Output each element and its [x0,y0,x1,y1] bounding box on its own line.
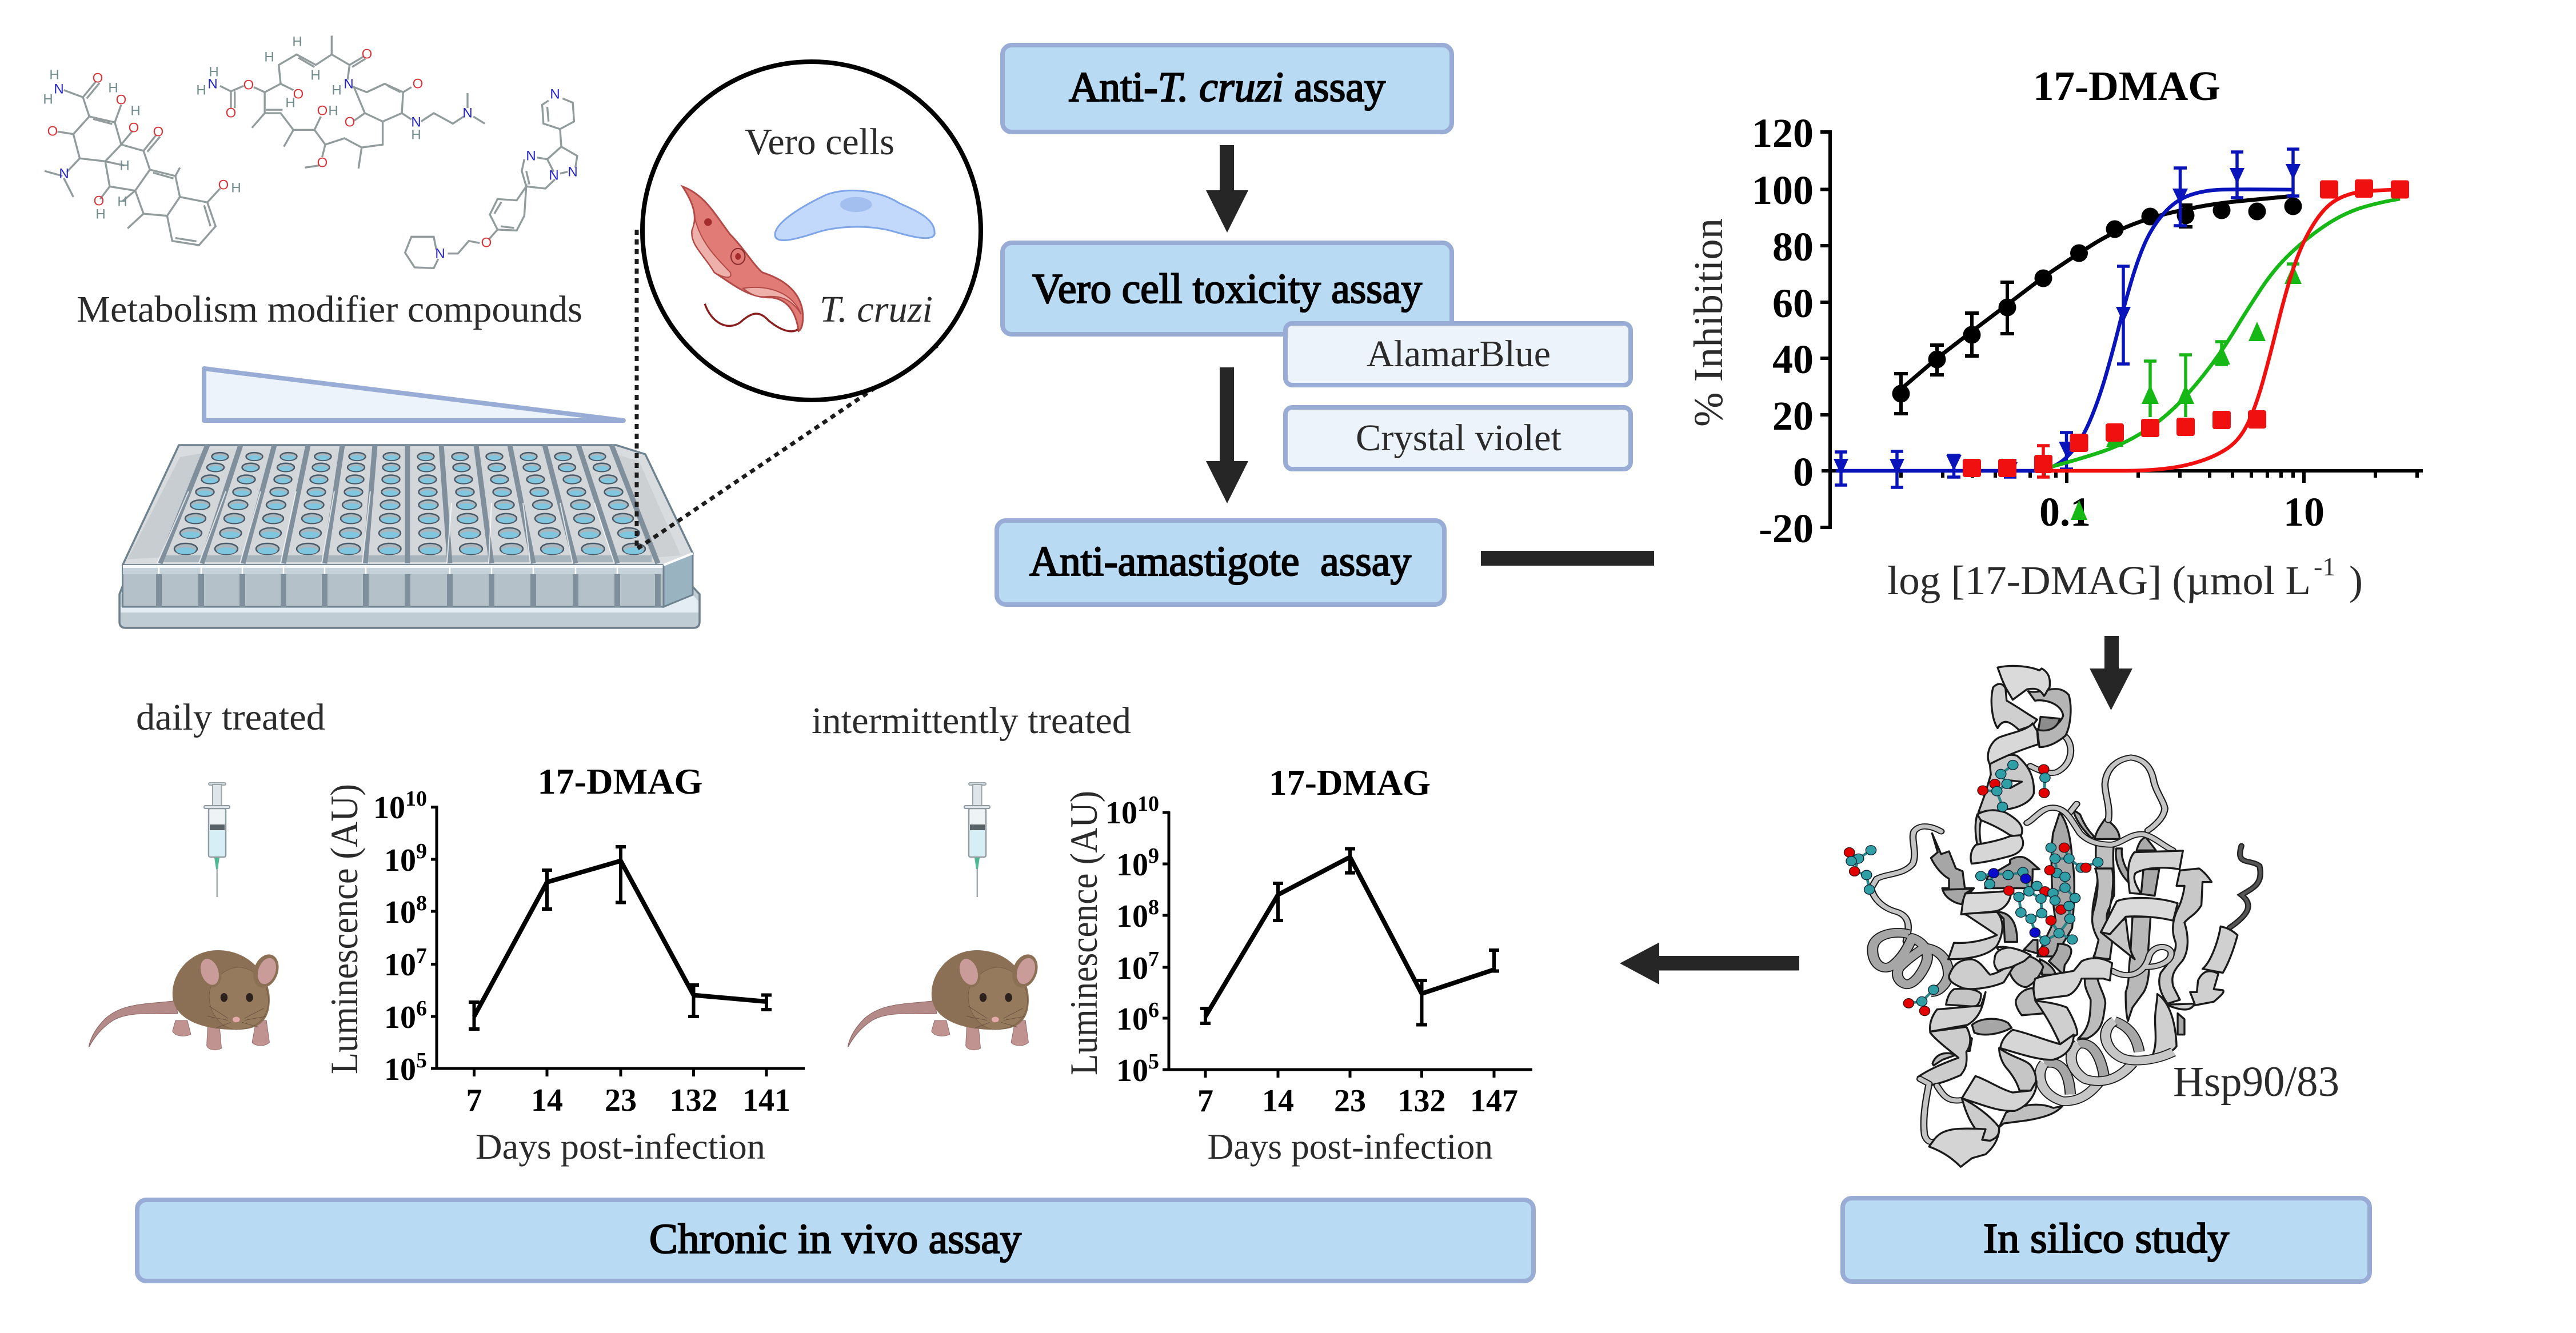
dilution gradient wedge [204,369,624,421]
molecule: tetracycline-like compound: H [117,194,127,209]
molecule: tetracycline-like compound: H [231,181,241,195]
data line [1205,857,1494,1016]
error bars [469,847,772,1029]
y tick labels: 9 [1148,844,1159,868]
y axis and ticks [1820,130,1830,529]
arrow: protein to in vivo [1620,943,1799,984]
x tick labels: 14 [531,1083,563,1118]
x axis and ticks [1822,471,2423,483]
molecule: 17-DMAG: O [413,77,423,91]
x axis title: -1 [2314,552,2335,581]
y tick labels: 10 [384,1000,416,1035]
x tick labels: 14 [1262,1083,1294,1119]
molecule: tetracycline-like compound: N [59,166,69,182]
y axis tick labels: 60 [1772,281,1814,326]
x axis title: Days post-infection [476,1126,765,1167]
molecule: pyrazolopyrimidine compound: O [481,235,492,250]
96-well plate [119,445,700,628]
molecule: pyrazolopyrimidine compound: N [549,168,559,183]
icon: T. cruzi parasite [682,186,803,331]
y axis title: Luminescence (AU) [1062,791,1105,1075]
series: red curve [1963,179,2409,477]
box: AlamarBlue: AlamarBlue [1367,333,1551,375]
box: Crystal violet [1285,407,1631,469]
chart title: 17-DMAG [537,761,703,802]
axes [1163,811,1532,1078]
axes [431,806,805,1076]
x tick labels: 7 [1197,1083,1213,1119]
molecule: pyrazolopyrimidine compound: N [526,149,536,163]
molecule: 17-DMAG: H [209,64,219,80]
y axis tick labels: 100 [1752,167,1814,213]
plate front wall [122,565,664,607]
x tick labels [1197,1083,1518,1119]
molecule: 17-DMAG: H [328,103,338,119]
molecule: tetracycline-like compound: O [218,177,229,193]
y tick labels: 10 [384,947,416,983]
box: Chronic in vivo assay [137,1200,1533,1281]
y tick labels: 10 [384,843,416,878]
bound ligand atoms [1844,760,2103,1016]
magnified well circle [642,62,981,400]
y axis tick labels: 120 [1752,110,1814,156]
T. cruzi label: T. cruzi [820,289,933,330]
molecule: tetracycline-like compound: O [116,93,126,107]
y tick labels: 10 [1137,792,1159,816]
ribbon: upper domain [1871,666,2183,956]
y tick labels: 10 [1116,1002,1148,1037]
molecule: pyrazolopyrimidine compound: N [568,165,578,179]
dotted zoom lines from well to circle [637,230,937,549]
x axis title: ) [2349,558,2363,603]
icon: mouse, intermittent [848,950,1041,1050]
chart: luminescence intermittent [1062,762,1532,1167]
molecule: 17-DMAG: H [285,95,295,111]
icon: syringe, daily [204,783,230,897]
box: Vero cell toxicity assay: Vero cell toxicity assay [1032,266,1422,313]
y tick labels: 10 [405,787,427,811]
chart: luminescence daily [322,761,805,1167]
box: Vero cell toxicity assay [1003,243,1452,334]
molecule: 17-DMAG [196,34,485,170]
molecule: 17-DMAG: N [207,77,218,91]
compound structures [43,34,578,268]
ribbon: lower domain [1872,868,2238,1167]
chart: 17-DMAG dose-response [1686,63,2423,603]
x axis tick labels [2039,489,2325,535]
y tick labels: 5 [1148,1050,1159,1074]
molecule: 17-DMAG: O [362,47,372,62]
series: blue curve [1834,149,2301,487]
y tick labels: 10 [384,1052,416,1087]
y axis tick labels: 20 [1772,393,1814,439]
molecule: 17-DMAG: H [310,67,321,83]
y tick labels: 10 [1116,899,1148,934]
molecule: tetracycline-like compound: O [94,193,104,209]
molecule: 17-DMAG: O [226,105,236,121]
error bars [1200,849,1499,1025]
ribbon: C-terminal tail [2230,846,2261,928]
molecule: pyrazolopyrimidine compound: N [435,246,445,262]
arrow: anti-T. cruzi to toxicity [1206,145,1248,233]
compound label: Metabolism modifier compounds [77,289,582,330]
y axis title: Luminescence (AU) [322,784,366,1074]
box: AlamarBlue [1285,323,1631,385]
protein structure: Hsp90/83 ribbon [1844,666,2261,1167]
connector bar to dose-response chart [1481,551,1654,566]
molecule: 17-DMAG: O [293,87,303,102]
plate lid top [122,445,693,565]
chart title: 17-DMAG [2033,63,2220,109]
box: Crystal violet: Crystal violet [1356,417,1561,459]
box: In silico study [1843,1198,2370,1282]
column dividers [160,445,658,563]
molecule: tetracycline-like compound: O [129,120,139,136]
x tick labels: 23 [1334,1083,1366,1119]
molecule: tetracycline-like compound: H [119,158,130,174]
y tick labels: 10 [1116,951,1148,986]
box: Anti-amastigote assay: Anti-amastigote assay [1029,538,1411,585]
molecule: 17-DMAG: H [411,127,421,143]
molecule: pyrazolopyrimidine compound: N [550,87,560,102]
molecule: 17-DMAG: H [332,82,342,98]
y tick labels: 5 [416,1048,427,1072]
protein label: Hsp90/83 [2173,1058,2339,1106]
y axis title: % Inhibition [1686,218,1731,427]
x tick labels [466,1083,790,1118]
y tick labels: 8 [1148,895,1159,919]
x axis title: Days post-infection [1207,1126,1493,1167]
y tick labels: 10 [1105,795,1137,831]
y tick labels: 10 [373,790,405,826]
molecule: tetracycline-like compound: H [130,103,141,119]
y axis tick labels: 0 [1793,449,1814,495]
icon: mouse, daily [89,950,282,1050]
data line [474,861,766,1016]
box: Anti-T. cruzi assay: Anti-T. cruzi assay [1069,64,1385,111]
plate tray [119,587,700,628]
molecule: pyrazolopyrimidine compound [405,87,578,268]
y axis tick labels: 80 [1772,224,1814,270]
y tick labels: 8 [416,891,427,915]
y axis tick labels: -20 [1759,506,1814,551]
x tick labels: 141 [742,1083,790,1118]
x axis tick labels: 0.1 [2039,489,2091,535]
y tick labels: 7 [1148,947,1159,971]
molecule: 17-DMAG: O [317,155,328,170]
box: Anti-T. cruzi assay [1003,45,1452,132]
molecule: tetracycline-like compound: H [95,207,106,222]
x tick labels: 23 [605,1083,637,1118]
label: daily treated: daily treated [136,696,325,738]
molecule: tetracycline-like compound [43,67,241,245]
x tick labels: 132 [1398,1083,1446,1119]
chart title: 17-DMAG [1269,762,1431,803]
y tick labels: 6 [416,996,427,1020]
molecule: 17-DMAG: O [317,103,328,119]
y tick labels: 10 [384,895,416,930]
molecule: 17-DMAG: O [345,114,355,130]
molecule: tetracycline-like compound: N [54,81,64,97]
y tick labels [1105,792,1159,1088]
wells [174,453,645,554]
molecule: tetracycline-like compound: H [43,91,53,107]
molecule: tetracycline-like compound: O [47,123,58,139]
box: In silico study: In silico study [1983,1215,2229,1262]
y tick labels: 10 [1116,1053,1148,1088]
x tick labels: 147 [1470,1083,1518,1119]
molecule: 17-DMAG: N [411,114,421,130]
icon: syringe, intermittent [964,783,990,897]
y axis tick labels [1752,110,1814,551]
molecule: tetracycline-like compound: H [49,67,59,82]
x tick labels: 7 [466,1083,482,1118]
x tick labels: 132 [670,1083,718,1118]
y tick labels: 9 [416,839,427,863]
arrow: toxicity to anti-amastigote [1206,367,1248,503]
molecule: 17-DMAG: H [196,82,206,98]
y tick labels: 10 [1116,847,1148,883]
Vero cells label: Vero cells [745,121,894,163]
molecule: tetracycline-like compound: O [93,71,103,86]
molecule: tetracycline-like compound: O [153,125,163,139]
y axis tick labels: 40 [1772,337,1814,382]
box: Anti-amastigote assay [997,521,1444,605]
series: green curve [2051,199,2400,520]
icon: Vero cell [775,190,934,241]
y tick labels [373,787,427,1087]
series: black curve [1892,196,2302,414]
label: intermittently treated: intermittently treated [812,700,1131,742]
molecule: 17-DMAG: H [292,34,302,49]
molecule: 17-DMAG: N [462,105,473,121]
molecule: 17-DMAG: O [243,78,254,93]
x axis title: log [17-DMAG] (µmol L [1887,558,2311,603]
molecule: 17-DMAG: H [264,49,274,65]
circle outline [642,62,981,400]
box: Chronic in vivo assay: Chronic in vivo assay [649,1216,1021,1263]
molecule: tetracycline-like compound: H [108,80,118,96]
arrow: chart to protein [2090,636,2132,710]
y tick labels: 7 [416,944,427,968]
y tick labels: 6 [1148,998,1159,1022]
molecule: 17-DMAG: N [344,77,354,91]
x axis tick labels: 10 [2283,489,2325,535]
